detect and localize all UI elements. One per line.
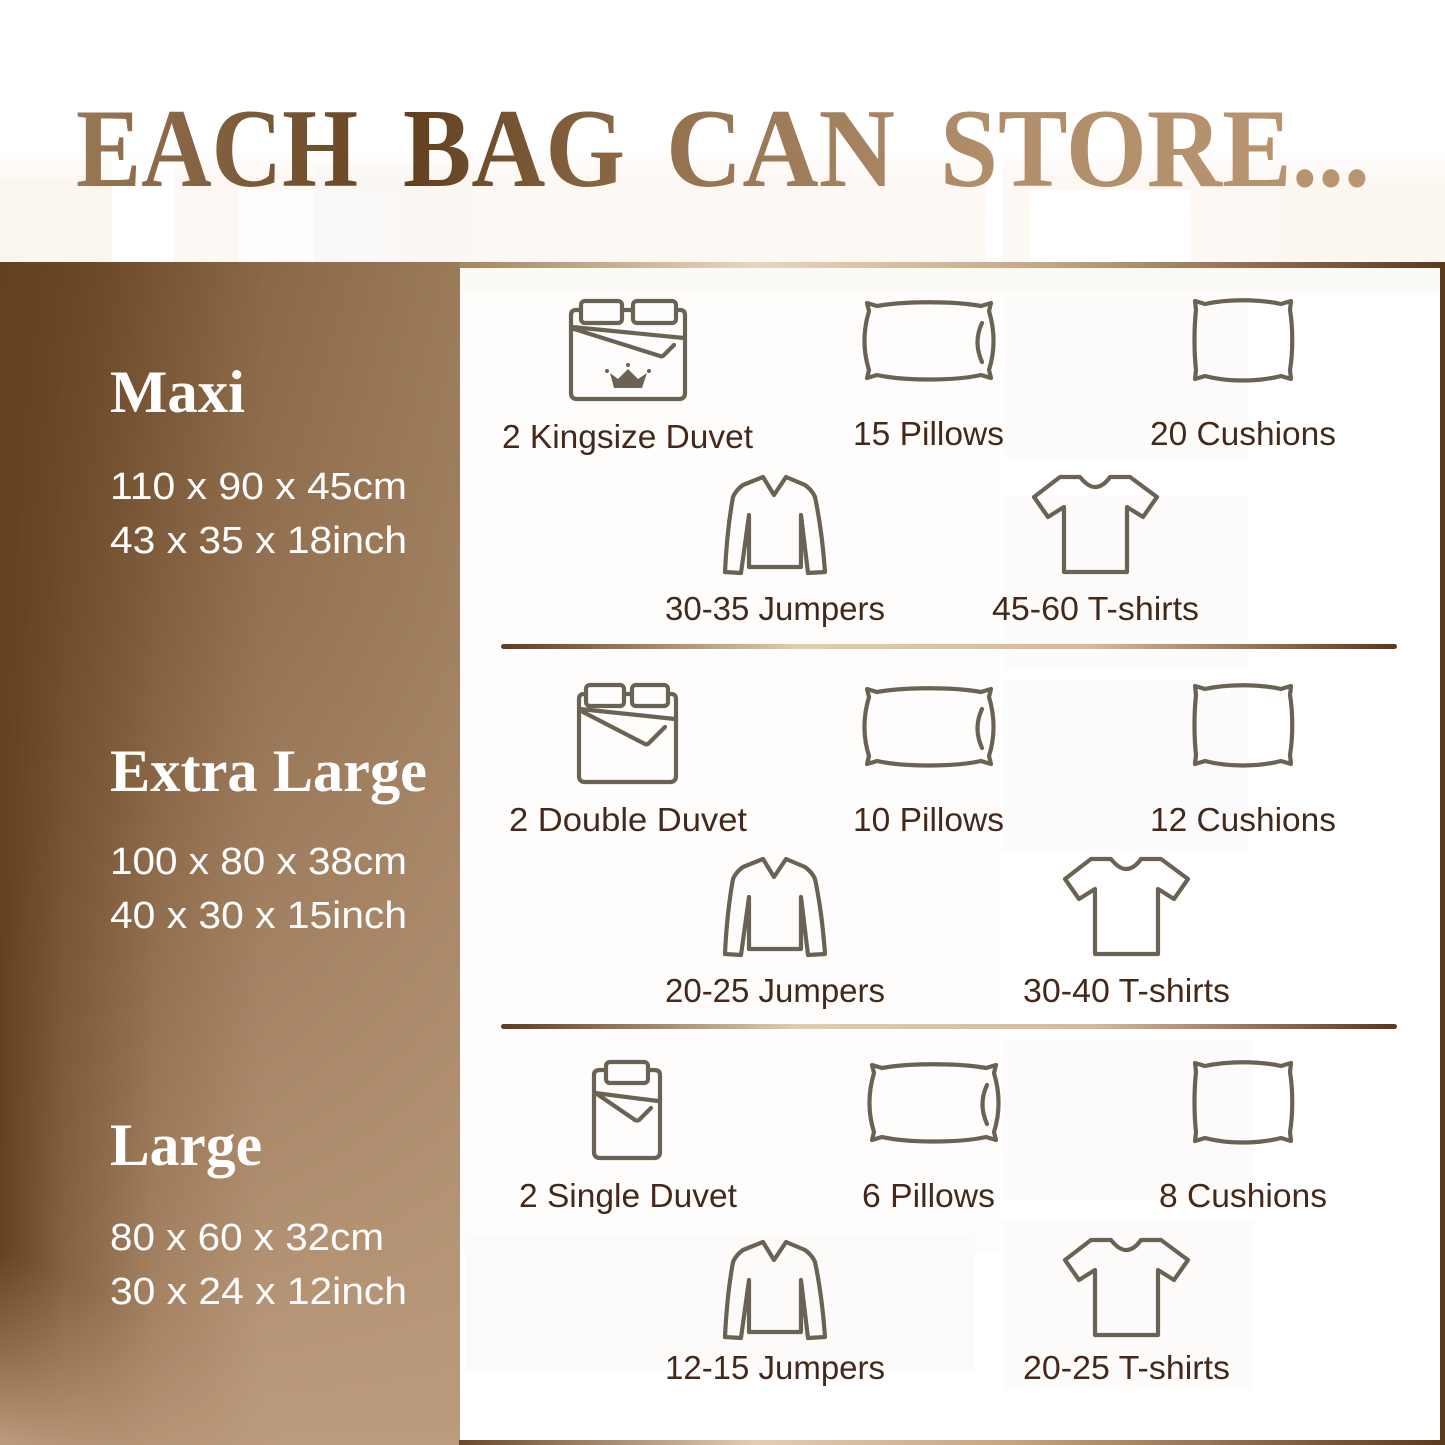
item: 12 Cushions: 12 Cushions	[1150, 801, 1336, 838]
item: 10 Pillows	[853, 688, 1004, 838]
item: 2 Single Duvet	[519, 1062, 737, 1214]
item: 15 Pillows: 15 Pillows	[853, 415, 1004, 452]
item: 12 Cushions	[1150, 685, 1336, 838]
divider: Maxi and Extra Large	[501, 644, 1397, 649]
panel: size sidebar	[0, 262, 460, 1445]
item: 30-35 Jumpers	[665, 477, 885, 627]
title	[76, 87, 1370, 211]
size: Maxi: Maxi	[110, 359, 245, 425]
size: Extra Large: Extra Large	[110, 738, 427, 804]
item: 12-15 Jumpers: 12-15 Jumpers	[665, 1349, 885, 1386]
icon: cushion	[1194, 300, 1292, 380]
icon: cushion	[1194, 1062, 1292, 1142]
title: EACH	[76, 87, 358, 211]
item: 30-40 T-shirts	[1023, 859, 1230, 1009]
item: 20-25 Jumpers: 20-25 Jumpers	[665, 972, 885, 1009]
size: Extra Large	[110, 738, 427, 937]
size: Maxi: 110 x 90 x 45cm	[110, 466, 407, 508]
icon: double bed	[579, 685, 676, 782]
icon: king bed	[571, 301, 685, 399]
size: Maxi	[110, 359, 407, 562]
item: 2 Kingsize Duvet: 2 Kingsize Duvet	[502, 418, 753, 455]
item: 2 Single Duvet: 2 Single Duvet	[519, 1177, 737, 1214]
item: 2 Kingsize Duvet	[502, 301, 753, 455]
item: 45-60 T-shirts	[992, 477, 1199, 627]
item: 2 Double Duvet	[509, 685, 747, 838]
item: 15 Pillows	[853, 302, 1004, 452]
panel: contents	[459, 262, 1445, 1445]
icon: pillow	[864, 688, 994, 766]
divider: Extra Large and Large	[501, 1024, 1397, 1029]
icon: jumper	[725, 1242, 825, 1338]
title: BAG	[403, 87, 625, 211]
item: 8 Cushions	[1159, 1062, 1327, 1214]
size: Maxi: 43 x 35 x 18inch	[110, 520, 407, 562]
icon: t-shirt	[1034, 477, 1157, 572]
size: Extra Large: 100 x 80 x 38cm	[110, 841, 407, 883]
item: 20 Cushions	[1150, 300, 1336, 452]
size: Large	[110, 1112, 407, 1313]
title: CAN	[666, 87, 895, 211]
icon: jumper	[725, 477, 825, 573]
item: 10 Pillows: 10 Pillows	[853, 801, 1004, 838]
icon: pillow	[864, 302, 994, 380]
item: 6 Pillows	[862, 1064, 998, 1214]
size: Large: 30 x 24 x 12inch	[110, 1271, 407, 1313]
item: 20-25 T-shirts	[1023, 1240, 1230, 1386]
item: 12-15 Jumpers	[665, 1242, 885, 1386]
item: 6 Pillows: 6 Pillows	[862, 1177, 995, 1214]
item: 30-35 Jumpers: 30-35 Jumpers	[665, 590, 885, 627]
frame	[459, 262, 1445, 1445]
icon: cushion	[1194, 685, 1292, 766]
item: 45-60 T-shirts: 45-60 T-shirts	[992, 590, 1199, 627]
size: Large: Large	[110, 1112, 262, 1178]
icon: single bed	[594, 1062, 660, 1158]
icon: t-shirt	[1065, 1240, 1188, 1335]
size: Extra Large: 40 x 30 x 15inch	[110, 895, 407, 937]
item: 20-25 Jumpers	[665, 859, 885, 1009]
icon: jumper	[725, 859, 825, 955]
item: 30-40 T-shirts: 30-40 T-shirts	[1023, 972, 1230, 1009]
item: 2 Double Duvet: 2 Double Duvet	[509, 801, 747, 838]
size: Large: 80 x 60 x 32cm	[110, 1217, 384, 1259]
title: STORE...	[940, 87, 1370, 211]
item: 8 Cushions: 8 Cushions	[1159, 1177, 1327, 1214]
item: 20-25 T-shirts: 20-25 T-shirts	[1023, 1349, 1230, 1386]
icon: pillow	[870, 1064, 998, 1142]
item: 20 Cushions: 20 Cushions	[1150, 415, 1336, 452]
icon: t-shirt	[1065, 859, 1188, 954]
